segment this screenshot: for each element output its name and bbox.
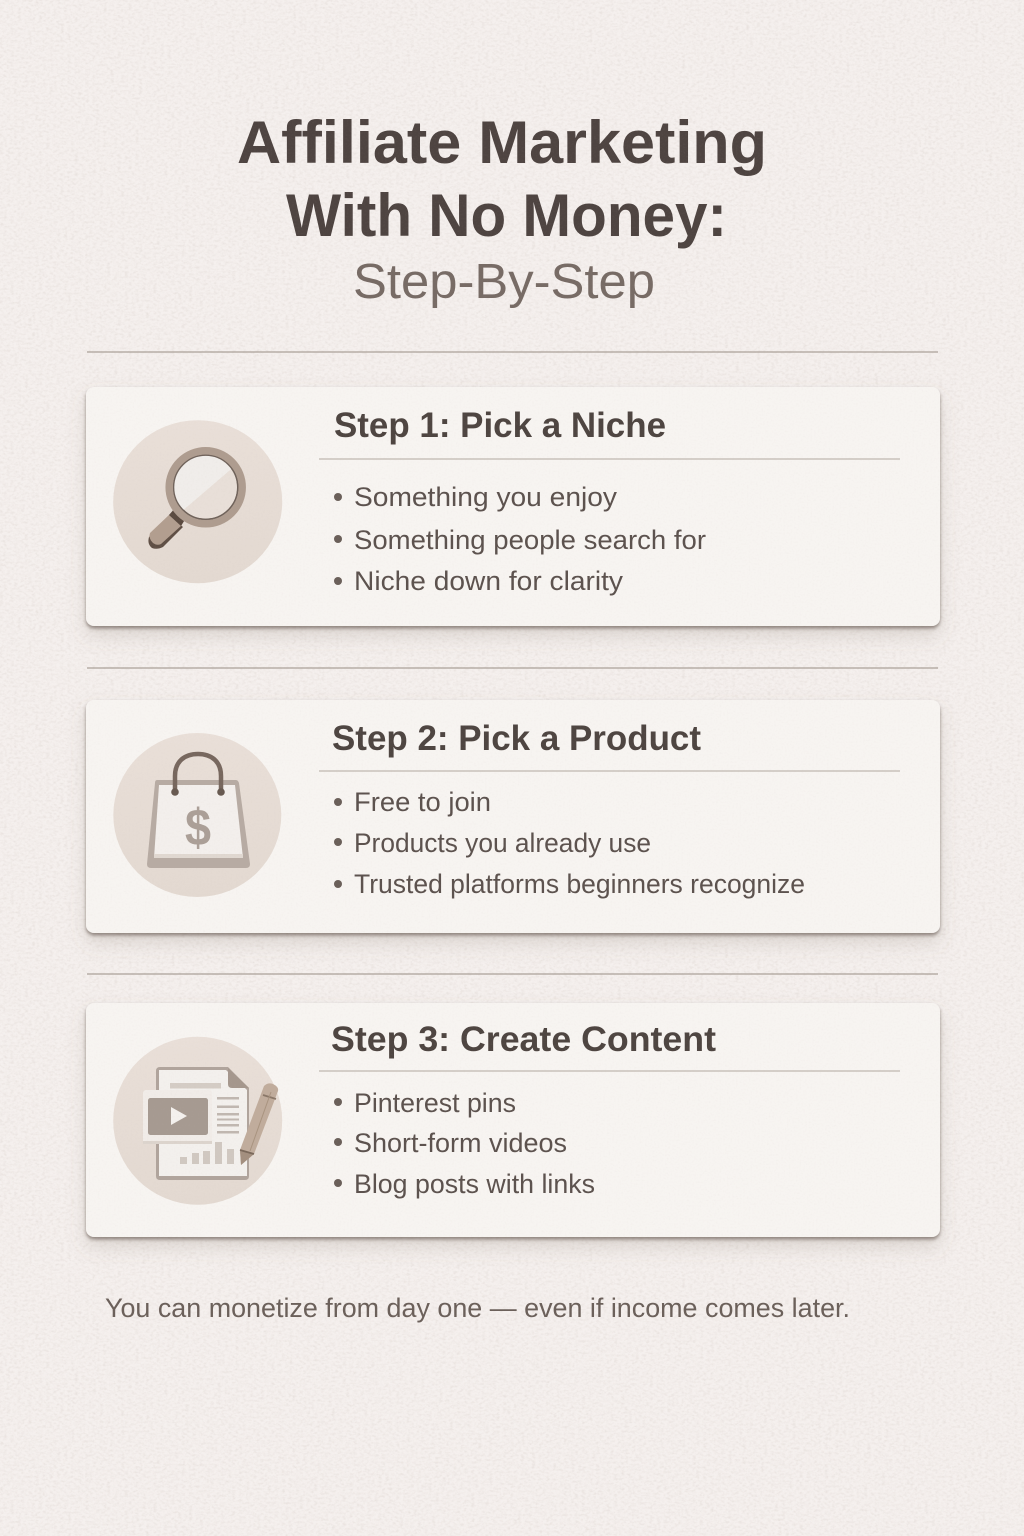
icon: shopping bag: $	[185, 799, 211, 857]
icon: shopping bag	[113, 733, 281, 897]
list: step 1 bullets: Something people search for	[354, 525, 706, 555]
list: step 3 bullets: Blog posts with links	[354, 1169, 595, 1199]
icon: content document, video and pencil	[113, 1037, 282, 1205]
heading: step 2: Step 2: Pick a Product	[332, 719, 701, 758]
title: With No Money:	[286, 182, 727, 249]
list: step 3 bullets: Pinterest pins	[354, 1088, 516, 1118]
list: step 2 bullets: Products you already use	[354, 828, 651, 858]
title: Affiliate Marketing	[237, 109, 767, 176]
list: step 3 bullets	[334, 1088, 595, 1199]
heading: step 3: Step 3: Create Content	[331, 1020, 716, 1059]
panel: step 1	[86, 387, 940, 626]
list: step 1 bullets: Something you enjoy	[354, 482, 618, 512]
title: Step-By-Step	[353, 255, 655, 309]
list: step 2 bullets: Trusted platforms beginners recognize	[354, 869, 805, 899]
list: step 1 bullets: Niche down for clarity	[354, 566, 624, 596]
panel: step 2	[86, 700, 940, 933]
list: step 2 bullets	[334, 787, 805, 899]
heading: step 1: Step 1: Pick a Niche	[334, 406, 666, 445]
list: step 2 bullets: Free to join	[354, 787, 491, 817]
footer note: You can monetize from day one — even if income comes later.	[105, 1293, 850, 1323]
panel: step 3	[86, 1003, 940, 1237]
list: step 3 bullets: Short-form videos	[354, 1128, 567, 1158]
title	[237, 109, 767, 309]
list: step 1 bullets	[334, 482, 706, 596]
icon: magnifying glass	[113, 420, 282, 583]
